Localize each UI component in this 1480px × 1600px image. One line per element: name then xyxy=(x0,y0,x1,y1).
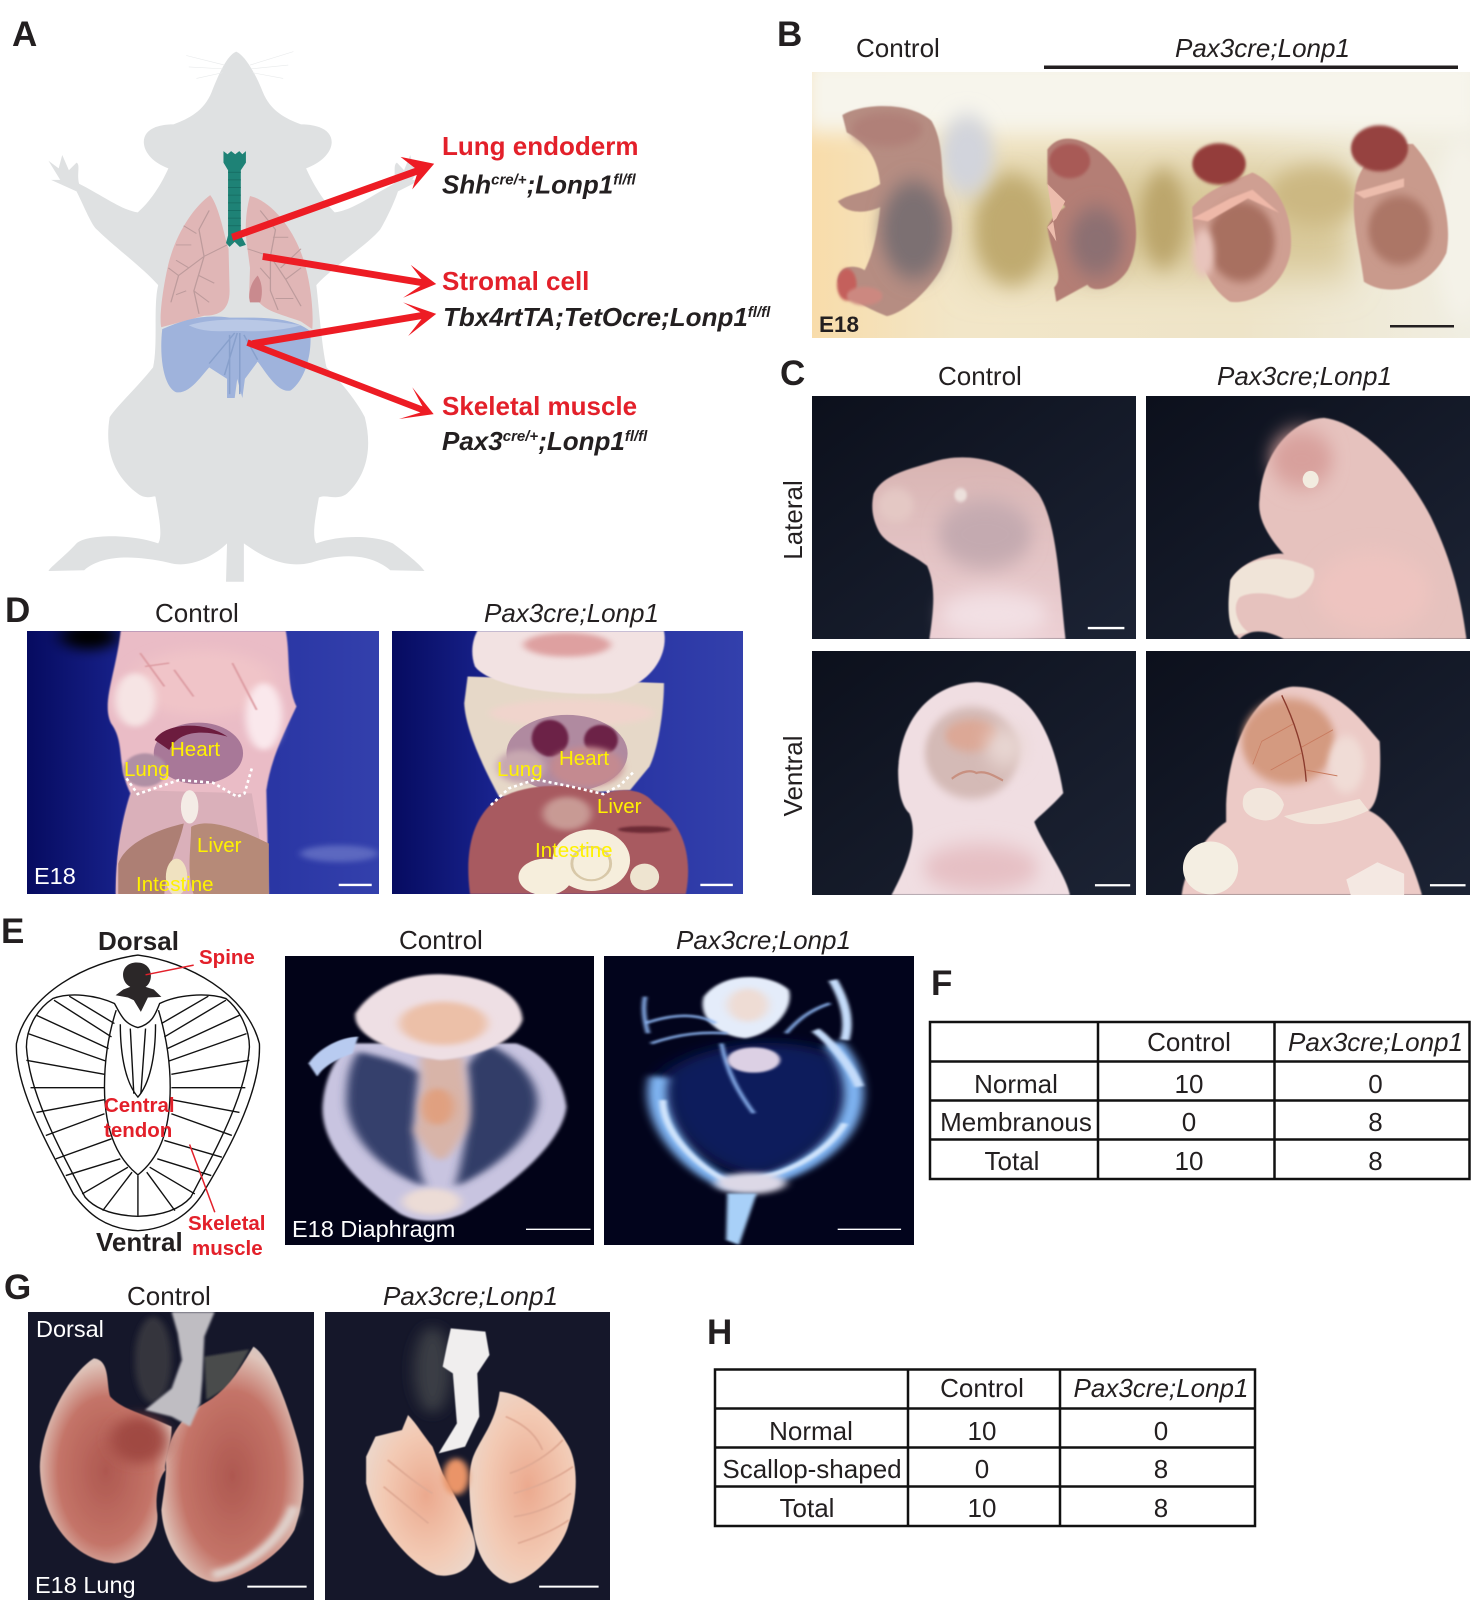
panel E: diaphragm xyxy=(1,912,914,1260)
mouse silhouette xyxy=(48,52,424,582)
table H xyxy=(715,1370,1255,1526)
table F: Normal xyxy=(974,1069,1058,1099)
trachea xyxy=(145,1312,215,1427)
arrow to Tbx4 label xyxy=(252,302,436,347)
Shh genotype: Shh xyxy=(442,170,491,200)
central remnant xyxy=(727,1047,780,1073)
bronchial tree xyxy=(168,210,301,314)
muscle ring outline xyxy=(26,995,249,1216)
organ labels mutant: Intestine xyxy=(535,839,612,862)
scale bar xyxy=(1390,325,1454,328)
lateral fringe xyxy=(308,1037,358,1077)
mutant heading: Pax3cre;Lonp1 xyxy=(383,1281,558,1311)
ventral bright xyxy=(716,1173,786,1194)
panel D: opened thorax xyxy=(5,591,743,896)
organ labels mutant: Heart xyxy=(559,747,609,770)
lung area xyxy=(123,753,167,787)
Lung endoderm label: Lung endoderm xyxy=(442,131,638,161)
table H: Scallop-shaped xyxy=(722,1454,902,1484)
scale bar xyxy=(1088,626,1124,630)
intestine xyxy=(166,859,187,895)
table H: 10 xyxy=(968,1416,996,1446)
table H: 0 xyxy=(1154,1416,1168,1446)
scale bar xyxy=(1430,883,1466,887)
table F: Total xyxy=(985,1146,1039,1176)
table F: 0 xyxy=(1182,1107,1196,1137)
photo: control diaphragm xyxy=(285,956,594,1245)
forelimb stubs xyxy=(1183,841,1238,894)
scale bar xyxy=(247,1584,307,1590)
table H: 0 xyxy=(975,1454,989,1484)
spine pointer xyxy=(146,965,194,975)
E18 stage label: E18 xyxy=(819,312,859,337)
midline vessel xyxy=(1282,695,1306,782)
right lobe xyxy=(161,1347,304,1582)
table F: Membranous xyxy=(940,1107,1092,1137)
mutant heading: Pax3cre;Lonp1 xyxy=(1175,33,1350,63)
control embryo xyxy=(838,106,952,316)
diaphragm central fibres xyxy=(209,333,258,394)
mutant heading: Pax3cre;Lonp1 xyxy=(1217,361,1392,391)
Control heading: Control xyxy=(938,361,1022,391)
skeletal muscle pointer xyxy=(190,1144,215,1212)
dotted diaphragm line xyxy=(491,772,634,805)
central tendon outline xyxy=(104,1010,170,1175)
panel A: mouse schematic with target tissues xyxy=(12,15,771,582)
head xyxy=(472,631,665,694)
label D: D xyxy=(5,591,30,630)
mutant embryo 2 xyxy=(1192,173,1291,302)
Lateral row label: Lateral xyxy=(778,480,808,560)
organ labels mutant xyxy=(497,747,642,862)
Skeletal muscle label: Skeletal muscle xyxy=(442,391,637,421)
table H: Control xyxy=(940,1373,1024,1403)
Central tendon label: Central xyxy=(104,1094,175,1117)
organ labels control xyxy=(124,738,242,896)
scale bar xyxy=(339,881,372,888)
label A: A xyxy=(12,15,37,54)
mutant embryo 1 xyxy=(1047,139,1136,302)
table H: 8 xyxy=(1154,1454,1168,1484)
organ labels control: Heart xyxy=(170,738,220,761)
Tbx4 genotype: fl/fl xyxy=(748,304,771,321)
photo: embryos xyxy=(812,72,1470,338)
arrow to stromal cell xyxy=(262,253,436,298)
liver xyxy=(468,786,688,894)
trachea xyxy=(439,1328,489,1453)
mouse anatomy illustration xyxy=(48,52,436,582)
label B: B xyxy=(777,15,802,54)
muscle fibres xyxy=(26,996,249,1216)
Pax3 genotype: Pax3 xyxy=(442,426,503,456)
tissue streaks xyxy=(140,653,257,710)
diaphragm highlight and tendon xyxy=(189,319,301,331)
label C: C xyxy=(780,354,805,393)
Ventral row label: Ventral xyxy=(778,736,808,816)
table F xyxy=(930,1022,1470,1179)
Ventral label: Ventral xyxy=(96,1227,183,1257)
left lung xyxy=(161,195,230,327)
scale bar xyxy=(838,1227,901,1231)
table H: Pax3cre;Lonp1 xyxy=(1074,1373,1248,1403)
diaphragm xyxy=(161,316,311,398)
photo: control ventral xyxy=(812,651,1136,895)
torn fibres xyxy=(644,997,830,1113)
mutant embryo 3 xyxy=(1354,144,1448,290)
organ labels control: Intestine xyxy=(136,873,214,896)
muscle label: muscle xyxy=(192,1237,263,1260)
panel G: lungs xyxy=(4,1268,610,1600)
pale lobe rim xyxy=(213,1507,294,1575)
panel C: lateral and ventral views xyxy=(778,354,1470,895)
organ labels control: Liver xyxy=(197,834,242,857)
table F: 10 xyxy=(1175,1146,1203,1176)
organ labels mutant: Liver xyxy=(597,795,642,818)
left lobe xyxy=(366,1415,475,1576)
photo: control lung xyxy=(28,1312,314,1600)
arrow to lung endoderm xyxy=(231,157,434,241)
scale bar xyxy=(1095,883,1130,887)
photo: control lateral xyxy=(812,396,1136,639)
right lobe xyxy=(469,1392,576,1583)
table H: Total xyxy=(780,1493,834,1523)
right lung xyxy=(246,196,313,329)
mutant bracket line xyxy=(1044,66,1458,69)
outer outline xyxy=(16,955,259,1231)
scale bar xyxy=(700,881,733,888)
lung tissue xyxy=(497,750,545,783)
table F: 0 xyxy=(1368,1069,1383,1099)
table H: 10 xyxy=(968,1493,996,1523)
E18 label: E18 xyxy=(34,863,76,889)
trachea xyxy=(223,151,246,247)
intestine coil xyxy=(552,830,630,891)
table H: Normal xyxy=(769,1416,853,1446)
table H: 8 xyxy=(1154,1493,1168,1523)
whiskers xyxy=(186,52,293,78)
photo: mutant thorax xyxy=(392,631,743,894)
tendon label: tendon xyxy=(104,1119,172,1142)
table F: 8 xyxy=(1368,1146,1383,1176)
Dorsal label: Dorsal xyxy=(36,1316,104,1342)
ventral bright xyxy=(402,1188,461,1215)
muscle ring xyxy=(657,1043,854,1184)
mouth xyxy=(952,771,1003,780)
photo: mutant diaphragm xyxy=(604,956,914,1245)
photo: mutant lateral xyxy=(1146,396,1470,639)
left lobe xyxy=(40,1358,172,1563)
Skeletal label: Skeletal xyxy=(188,1212,266,1235)
Control heading: Control xyxy=(155,598,239,628)
arrow to skeletal muscle xyxy=(246,339,434,419)
organ labels mutant: Lung xyxy=(497,758,543,781)
table F: 8 xyxy=(1368,1107,1383,1137)
Pax3 genotype: ;Lonp1 xyxy=(538,426,625,456)
dorsal tuft xyxy=(703,977,790,1038)
Control heading: Control xyxy=(856,33,940,63)
E18 Lung label: E18 Lung xyxy=(35,1572,136,1598)
eye spot xyxy=(954,488,967,502)
Shh genotype: fl/fl xyxy=(613,172,637,188)
tracheal rings xyxy=(228,172,241,226)
neck tissue xyxy=(464,676,664,797)
scale bar xyxy=(526,1227,590,1231)
spine xyxy=(116,962,161,1012)
Dorsal label: Dorsal xyxy=(98,926,179,956)
label F: F xyxy=(931,964,952,1003)
head vessels xyxy=(1253,724,1337,776)
dorsal tuft xyxy=(355,974,522,1060)
label G: G xyxy=(4,1268,31,1307)
panel F: diaphragm table xyxy=(930,964,1470,1179)
Control heading: Control xyxy=(399,925,483,955)
xiphoid xyxy=(181,790,198,823)
eye spot xyxy=(1303,471,1319,488)
central tendon xyxy=(414,1057,469,1160)
photo: mutant ventral xyxy=(1146,651,1470,895)
E18 Diaphragm label: E18 Diaphragm xyxy=(292,1216,455,1242)
dotted diaphragm line xyxy=(127,768,252,797)
forelimb xyxy=(1229,559,1314,635)
photo: control thorax xyxy=(27,631,379,894)
table F: 10 xyxy=(1175,1069,1203,1099)
scale bar xyxy=(539,1584,599,1590)
inner lens xyxy=(120,1024,156,1097)
photo: mutant lung xyxy=(325,1312,610,1600)
heart xyxy=(154,723,243,784)
Spine label: Spine xyxy=(199,946,255,969)
thoracic cavity xyxy=(506,715,628,792)
organ labels control: Lung xyxy=(124,758,170,781)
Tbx4 genotype: Tbx4rtTA;TetOcre;Lonp1 xyxy=(443,302,748,332)
abdomen wall xyxy=(116,790,269,894)
diaphragm schematic xyxy=(16,955,259,1231)
table F: Pax3cre;Lonp1 xyxy=(1288,1027,1463,1057)
Pax3 genotype: fl/fl xyxy=(625,428,648,445)
panel H: lung table xyxy=(707,1313,1255,1526)
Stromal cell label: Stromal cell xyxy=(442,266,589,296)
lobe scallops xyxy=(384,1417,573,1543)
mutant heading: Pax3cre;Lonp1 xyxy=(484,598,659,628)
mutant heading: Pax3cre;Lonp1 xyxy=(676,925,851,955)
Shh genotype: cre/+ xyxy=(491,172,527,188)
Control heading: Control xyxy=(127,1281,211,1311)
lung dark lobe xyxy=(249,276,262,302)
table F: Control xyxy=(1147,1027,1231,1057)
hilum xyxy=(443,1458,469,1495)
label H: H xyxy=(707,1313,732,1352)
Shh genotype: ;Lonp1 xyxy=(527,170,613,200)
liver lobes xyxy=(118,823,184,894)
Pax3 genotype: cre/+ xyxy=(503,428,538,445)
label E: E xyxy=(1,912,24,951)
panel B: whole embryos xyxy=(777,15,1480,338)
